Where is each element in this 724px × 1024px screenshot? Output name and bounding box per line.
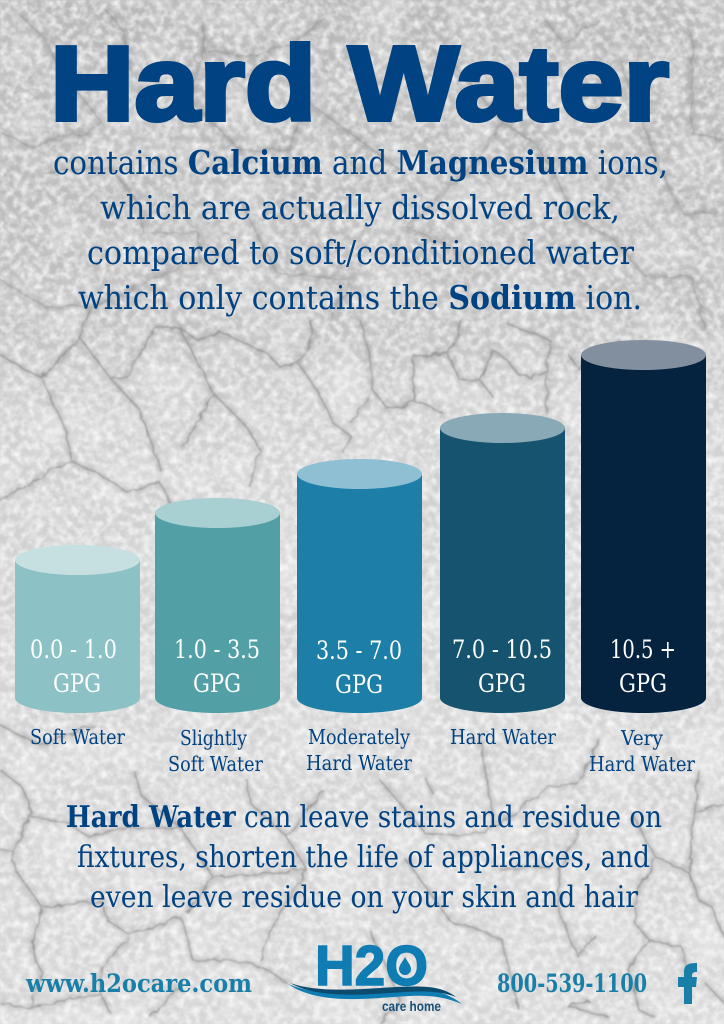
phone number: 800-539-1100 <box>497 969 647 998</box>
cylinder labels <box>30 725 695 776</box>
cylinder: very hard water: 10.5 + <box>610 635 676 664</box>
icon: facebook <box>678 963 697 1004</box>
cylinder: slightly soft water: GPG <box>193 669 241 698</box>
cylinder: very hard water: GPG <box>619 669 667 698</box>
cylinder: very hard water <box>581 340 706 713</box>
cylinder labels: Hard Water <box>306 751 412 775</box>
intro text block: which only contains the Sodium ion. <box>78 278 642 317</box>
website: www.h2ocare.com <box>25 969 252 998</box>
cylinder labels: Soft Water <box>168 752 263 776</box>
cylinder labels: Hard Water <box>450 725 556 749</box>
title: Hard Water <box>50 25 669 143</box>
cylinder: slightly soft water: 1.0 - 3.5 <box>174 635 260 664</box>
intro text block: which are actually dissolved rock, <box>100 188 620 227</box>
cylinder labels: Moderately <box>308 725 410 749</box>
cylinder: moderately hard water <box>297 459 422 713</box>
cylinder: hard water <box>440 413 565 713</box>
cylinder labels: Soft Water <box>30 725 125 749</box>
intro text block: compared to soft/conditioned water <box>87 233 634 272</box>
bottom text block: fixtures, shorten the life of appliances, and <box>77 840 650 875</box>
cylinder labels: Hard Water <box>589 752 695 776</box>
logo: H2O care home <box>288 934 462 1014</box>
intro text block: contains Calcium and Magnesium ions, <box>53 143 668 182</box>
cylinder: hard water: 7.0 - 10.5 <box>452 635 552 664</box>
bottom text block: Hard Water can leave stains and residue on <box>66 800 662 835</box>
cylinder: soft water <box>15 545 140 713</box>
cylinder: soft water: 0.0 - 1.0 <box>30 635 117 664</box>
bottom text block: even leave residue on your skin and hair <box>90 880 639 915</box>
cylinder: slightly soft water <box>155 498 280 713</box>
cylinder: moderately hard water: GPG <box>335 670 383 699</box>
logo: H2O care home: H2O <box>315 934 428 998</box>
cylinder labels: Very <box>620 726 663 750</box>
intro text block <box>53 143 668 317</box>
bottom text block <box>66 800 662 915</box>
icon: water drop <box>399 957 411 975</box>
cylinder labels: Slightly <box>180 726 247 750</box>
cylinder: moderately hard water: 3.5 - 7.0 <box>316 636 402 665</box>
cylinder: soft water: GPG <box>53 669 101 698</box>
cylinder chart <box>15 340 706 713</box>
cylinder: hard water: GPG <box>478 669 526 698</box>
logo: H2O care home: care home <box>382 998 441 1014</box>
